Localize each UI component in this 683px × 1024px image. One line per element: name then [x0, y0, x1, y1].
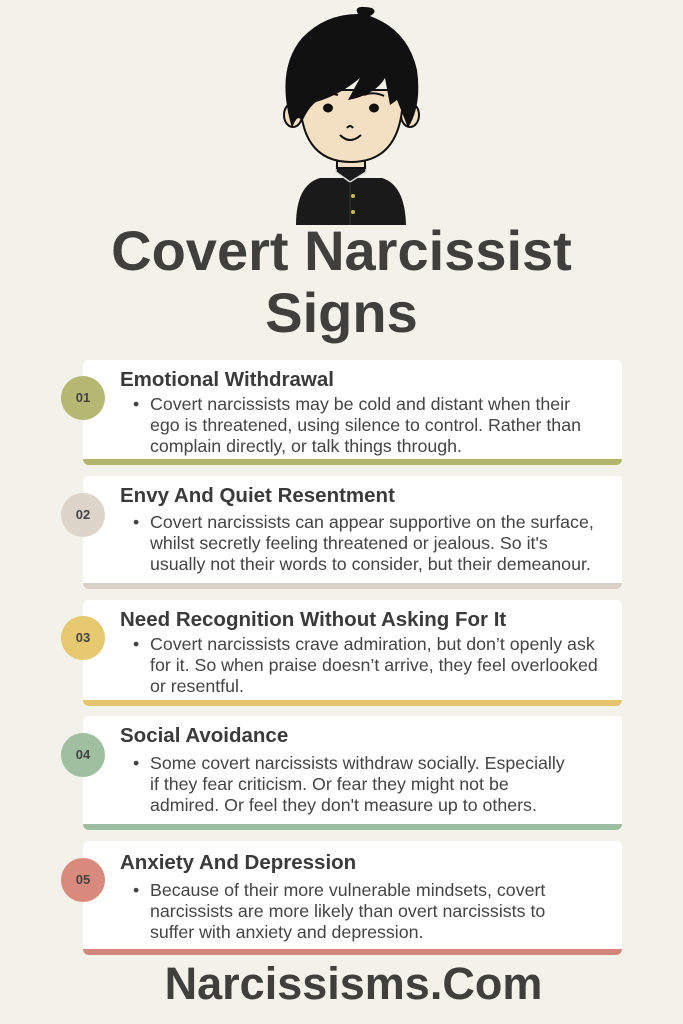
card 1: ego is threatened, using silence to control. Rather than: [150, 415, 581, 435]
card 4: Social Avoidance: [120, 724, 288, 747]
card 3: or resentful.: [150, 676, 244, 696]
badge 05: [61, 858, 105, 902]
badge 05: 05: [76, 872, 90, 887]
card 5: Because of their more vulnerable mindsets, covert: [150, 880, 545, 900]
badge 04: 04: [76, 747, 90, 762]
card 1: Emotional Withdrawal: [120, 368, 334, 391]
title: Signs: [265, 281, 418, 344]
card 3: for it. So when praise doesn’t arrive, they feel overlooked: [150, 655, 598, 675]
card 4: Some covert narcissists withdraw socially. Especially: [150, 753, 565, 773]
badge 02: [61, 493, 105, 537]
card 1: [83, 360, 622, 465]
badge 03: [61, 616, 105, 660]
card 3: [83, 600, 622, 706]
card 2: Covert narcissists can appear supportive on the surface,: [150, 512, 594, 532]
badge 04: [61, 733, 105, 777]
card 4: [83, 716, 622, 830]
footer: Narcissisms.Com: [165, 958, 542, 1009]
title: [111, 219, 572, 344]
card 5: [83, 841, 622, 955]
title: Covert Narcissist: [111, 219, 572, 282]
badge 01: [61, 376, 105, 420]
card 5: narcissists are more likely than overt narcissists to: [150, 901, 545, 921]
card 3: Need Recognition Without Asking For It: [120, 608, 506, 631]
card 1: Covert narcissists may be cold and distant when their: [150, 394, 570, 414]
badge 01: 01: [76, 390, 90, 405]
card 4: if they fear criticism. Or fear they might not be: [150, 774, 509, 794]
card 2: Envy And Quiet Resentment: [120, 484, 395, 507]
card 5: Anxiety And Depression: [120, 851, 356, 874]
card 3: Covert narcissists crave admiration, but don’t openly ask: [150, 634, 595, 654]
badge 02: 02: [76, 507, 90, 522]
card 5: suffer with anxiety and depression.: [150, 922, 423, 942]
card 4: admired. Or feel they don't measure up to others.: [150, 795, 537, 815]
card 2: whilst secretly feeling threatened or jealous. So it's: [150, 533, 548, 553]
icon: character illustration: [283, 6, 420, 225]
card 2: usually not their words to consider, but their demeanour.: [150, 554, 591, 574]
card 2: [83, 476, 622, 589]
card 1: complain directly, or talk things through.: [150, 436, 462, 456]
badge 03: 03: [76, 630, 90, 645]
